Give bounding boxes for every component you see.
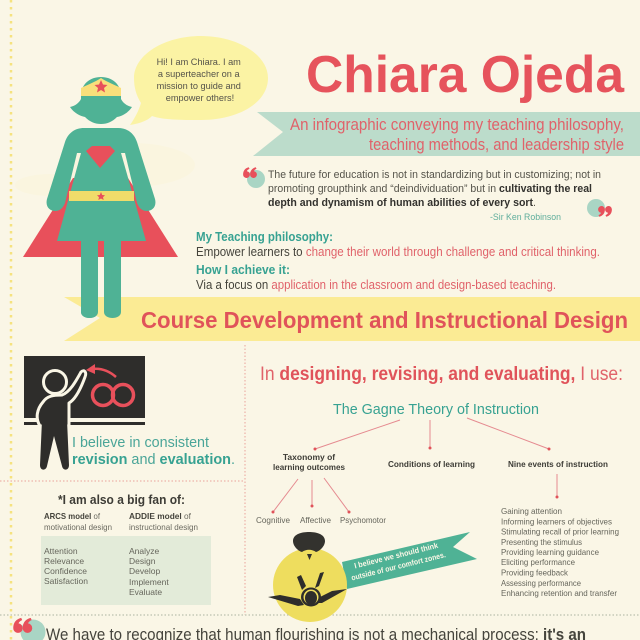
nine events list <box>501 506 619 598</box>
teaching philosophy: My Teaching philosophy: <box>196 230 333 244</box>
icon: hair and head <box>70 77 132 124</box>
icon: teacher silhouette <box>37 370 86 470</box>
section banner: course development <box>64 297 640 341</box>
ARCS heading: ARCS model of <box>44 511 101 521</box>
ADDIE list: Develop <box>129 566 160 576</box>
arrow: nine events <box>556 474 558 498</box>
taxonomy labels: Psychomotor <box>340 515 386 525</box>
quote text <box>268 169 601 209</box>
taxonomy labels: Cognitive <box>256 515 290 525</box>
superhero teacher figure <box>23 77 178 318</box>
icon: belt star <box>97 192 105 200</box>
Gagne category labels: Conditions of learning <box>388 459 475 469</box>
ADDIE list <box>129 546 169 597</box>
nine events list: Providing learning guidance <box>501 547 599 557</box>
icon: belt <box>69 191 134 201</box>
speech bubble: Hi! I am Chiara. I am <box>157 57 241 67</box>
ARCS heading <box>44 511 112 532</box>
taxonomy labels: Affective <box>300 515 331 525</box>
heading: designing, revising, evaluating: In designing, revising, and evaluating, I use: <box>260 364 623 385</box>
ARCS list: Satisfaction <box>44 576 88 586</box>
icon: skydiver <box>268 572 347 606</box>
icon: revision rings <box>92 384 134 406</box>
teaching philosophy: Empower learners to change their world through challenge and critical thinking. <box>196 245 600 259</box>
nine events list: Assessing performance <box>501 578 581 588</box>
Gagne category labels: learning outcomes <box>273 462 345 472</box>
icon: red arrow <box>86 364 116 377</box>
ADDIE heading: ADDIE model of <box>129 511 192 521</box>
how I achieve it <box>196 263 556 292</box>
nine events list: Providing feedback <box>501 568 569 578</box>
icon: parachute knot <box>307 554 312 560</box>
nine events list: Eliciting performance <box>501 557 575 567</box>
ARCS list: Confidence <box>44 566 87 576</box>
icon: red cape <box>23 178 178 257</box>
icon: blackboard <box>24 356 145 418</box>
nine events list: Enhancing retention and transfer <box>501 588 617 598</box>
arrows: Gagne branches <box>314 418 550 450</box>
nine events list: Presenting the stimulus <box>501 537 583 547</box>
panel: models <box>41 493 211 605</box>
revision statement: I believe in consistent <box>72 435 209 451</box>
comfort zone banner <box>342 532 477 589</box>
icon: chest emblem <box>86 146 115 168</box>
arrows: taxonomy branches <box>272 478 350 514</box>
speech bubble: a superteacher on a <box>158 69 240 79</box>
ARCS list: Attention <box>44 546 78 556</box>
ADDIE list: Design <box>129 556 156 566</box>
Gagne category labels <box>273 452 608 472</box>
ARCS heading: motivational design <box>44 522 112 532</box>
icon: body and dress <box>47 128 155 318</box>
quote text: The future for education is not in standardizing but in customizing; not in <box>268 169 601 181</box>
quote text: promoting groupthink and “deindividuation” but in cultivating the real <box>268 183 592 195</box>
ARCS list <box>44 546 88 586</box>
speech bubble: empower others! <box>166 93 234 103</box>
teaching philosophy <box>196 230 600 259</box>
icon: bottom quote mark <box>13 618 46 640</box>
icon: tiara <box>81 78 121 96</box>
revision statement: revision and evaluation. <box>72 452 235 468</box>
taxonomy labels <box>256 515 386 525</box>
heading: big fan: *I am also a big fan of: <box>58 493 185 507</box>
green list box <box>41 536 211 605</box>
speech bubble: mission to guide and <box>157 81 241 91</box>
ADDIE list: Analyze <box>129 546 160 556</box>
ARCS list: Relevance <box>44 556 84 566</box>
nine events list: Gaining attention <box>501 506 562 516</box>
ADDIE list: Implement <box>129 577 169 587</box>
ADDIE heading <box>129 511 198 532</box>
revision statement <box>72 435 235 468</box>
icon: teacher at blackboard <box>24 356 145 470</box>
icon: skydiver in yellow circle <box>268 532 347 622</box>
how I achieve it: How I achieve it: <box>196 263 290 277</box>
ADDIE heading: instructional design <box>129 522 198 532</box>
quote attribution: -Sir Ken Robinson <box>490 212 561 223</box>
icon: parachute <box>293 532 325 552</box>
speech bubble <box>130 36 268 125</box>
quote text: depth and dynamism of human abilities of every sort. <box>268 197 536 209</box>
icon: closing quote mark <box>587 199 612 217</box>
subtitle ribbon <box>253 112 640 156</box>
Gagne category labels: Taxonomy of <box>283 452 335 462</box>
how I achieve it: Via a focus on application in the classroom and design-based teaching. <box>196 278 556 292</box>
nine events list: Stimulating recall of prior learning <box>501 526 619 536</box>
ADDIE list: Evaluate <box>129 587 162 597</box>
heading: Gagne theory: The Gagne Theory of Instruction <box>333 401 539 418</box>
section banner: course development: Course Development and Instructional Design <box>141 307 628 333</box>
comfort zone banner: I believe we should think <box>353 541 440 570</box>
icon: opening quote mark <box>243 167 265 188</box>
nine events list: Informing learners of objectives <box>501 516 613 526</box>
title: Chiara Ojeda <box>306 46 625 104</box>
comfort zone banner: outside of our comfort zones. <box>350 550 447 582</box>
icon: tiara star <box>94 80 108 92</box>
Gagne category labels: Nine events of instruction <box>508 459 608 469</box>
